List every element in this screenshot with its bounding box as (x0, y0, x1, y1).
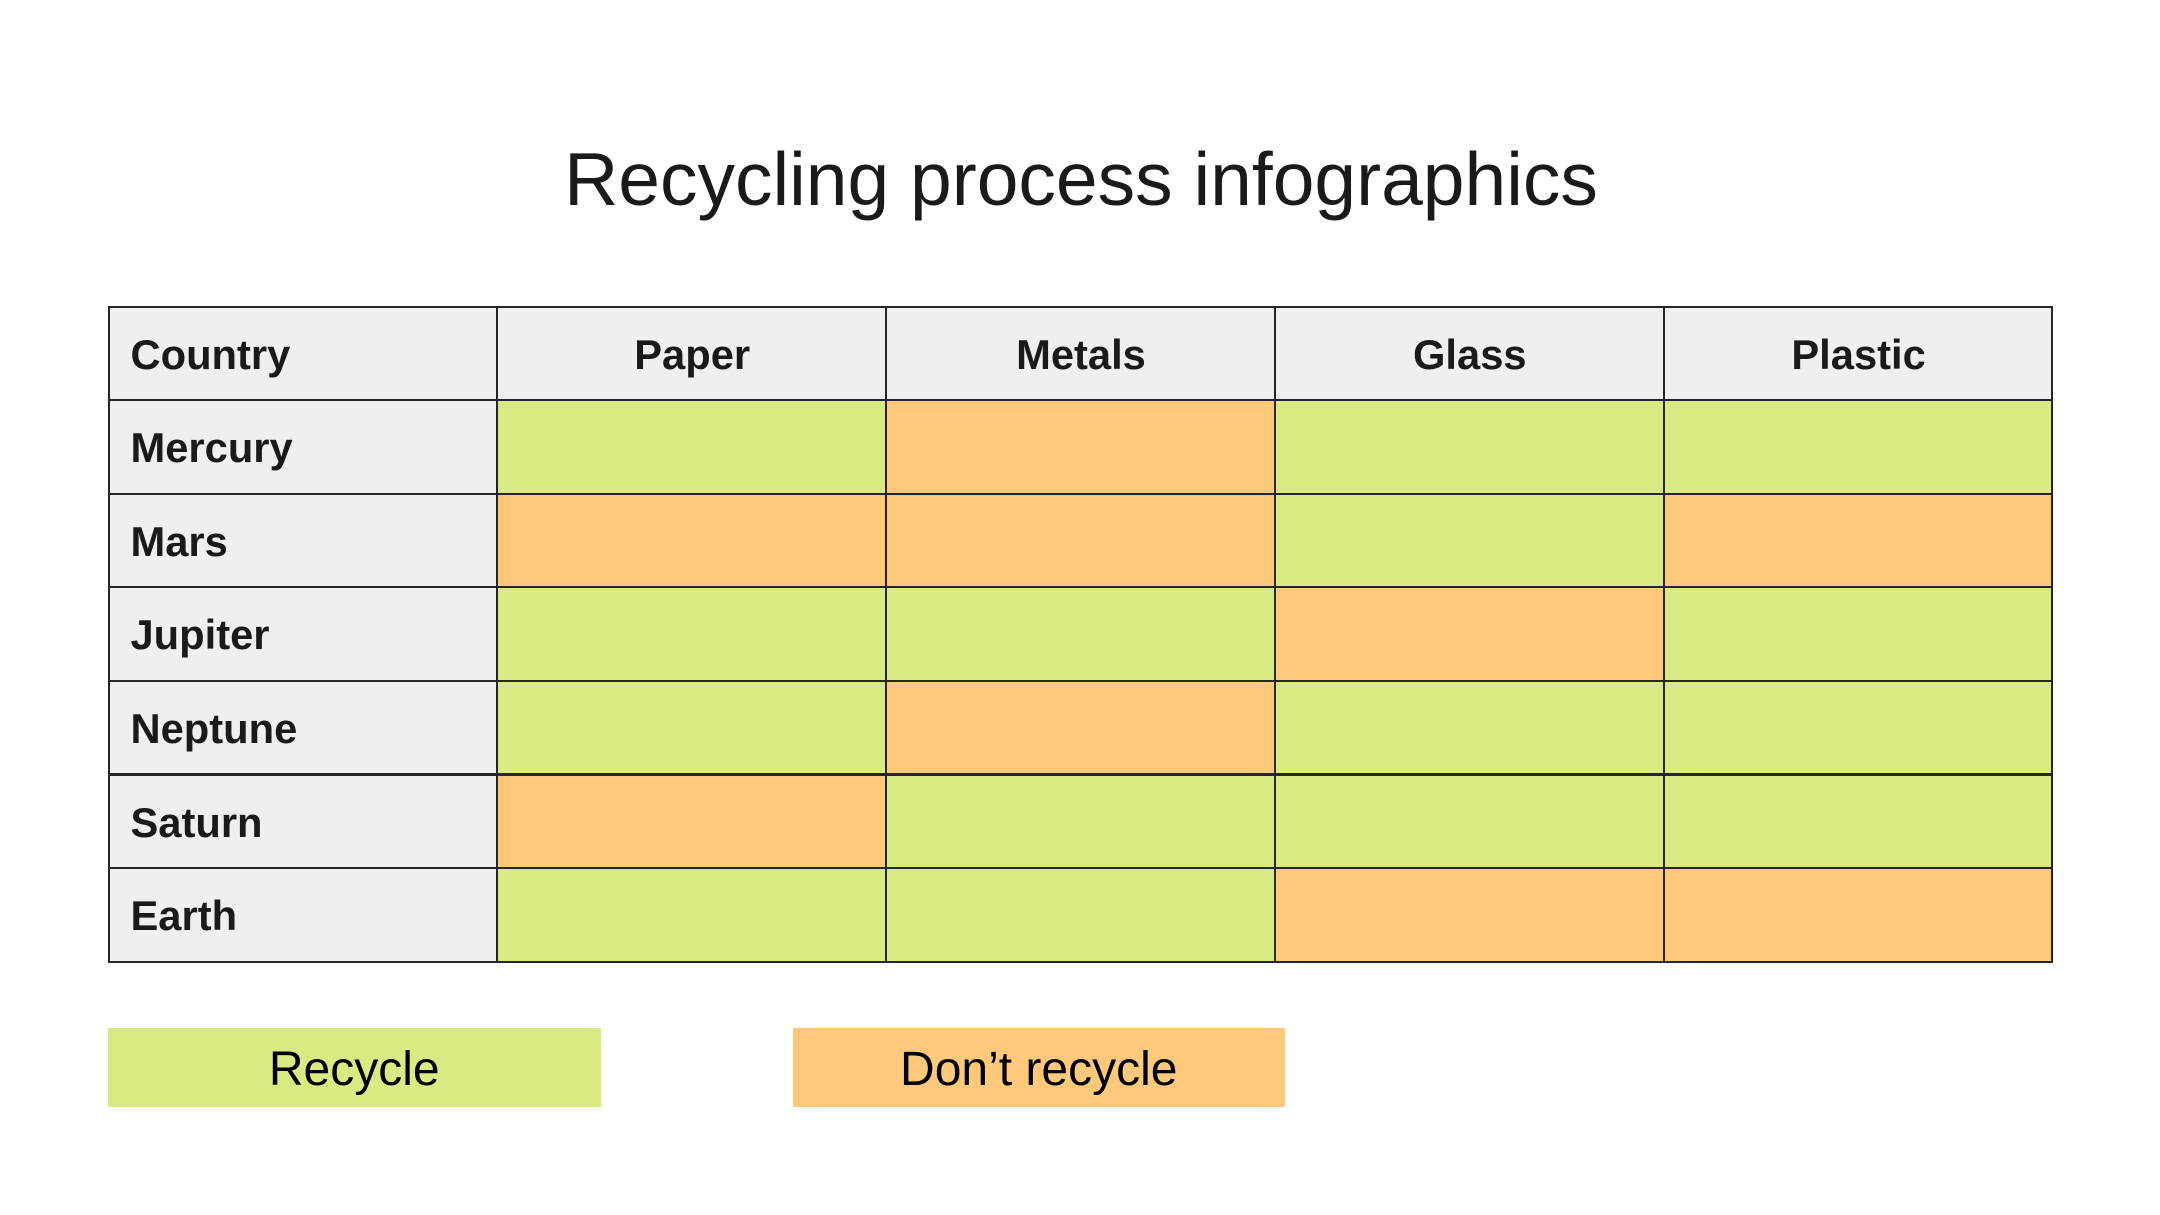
legend: Don't recycle (792, 1028, 1285, 1107)
Neptune Glass: recycle (1274, 680, 1665, 775)
legend: Recycle (108, 1028, 600, 1107)
row label: Neptune (108, 680, 498, 775)
Mercury Glass: recycle (1274, 399, 1665, 495)
row label: Jupiter: Jupiter (130, 611, 270, 658)
Saturn Glass: recycle (1274, 774, 1665, 869)
Earth Glass: don't recycle (1274, 867, 1665, 963)
Mercury Metals: don't recycle (885, 399, 1276, 495)
row label: Mars (108, 493, 498, 588)
Neptune Metals: don't recycle (885, 680, 1276, 775)
header: Glass: Glass (1413, 330, 1527, 378)
Mars Paper: don't recycle (496, 493, 887, 588)
row label: Mars: Mars (130, 518, 228, 565)
header: Glass (1274, 306, 1665, 401)
Earth Plastic: don't recycle (1663, 867, 2053, 963)
Mercury Paper: recycle (496, 399, 887, 495)
Mars Glass: recycle (1274, 493, 1665, 588)
row label: Neptune: Neptune (130, 705, 297, 752)
legend: Recycle: Recycle (269, 1043, 440, 1096)
header: Plastic (1663, 306, 2053, 401)
row label: Earth (108, 867, 498, 963)
header: Metals: Metals (1016, 330, 1146, 378)
Saturn Metals: recycle (885, 774, 1276, 869)
Jupiter Glass: don't recycle (1274, 586, 1665, 682)
Neptune Plastic: recycle (1663, 680, 2053, 775)
row label: Jupiter (108, 586, 498, 682)
Earth Paper: recycle (496, 867, 887, 963)
header: Plastic: Plastic (1791, 330, 1926, 378)
Mars Plastic: don't recycle (1663, 493, 2053, 588)
Neptune Paper: recycle (496, 680, 887, 775)
Mars Metals: don't recycle (885, 493, 1276, 588)
row label: Earth: Earth (130, 892, 237, 939)
Jupiter Paper: recycle (496, 586, 887, 682)
header: Paper: Paper (634, 330, 750, 378)
row label: Saturn (108, 774, 498, 869)
header: Country: Country (130, 330, 290, 378)
Mercury Plastic: recycle (1663, 399, 2053, 495)
table: recycling by country and material (108, 306, 2053, 963)
row label: Saturn: Saturn (130, 798, 263, 846)
row label: Mercury: Mercury (130, 424, 293, 471)
Saturn Paper: don't recycle (496, 774, 887, 869)
legend: Don't recycle: Don’t recycle (900, 1043, 1177, 1096)
Earth Metals: recycle (885, 867, 1276, 963)
header: Country (108, 306, 498, 401)
title: Recycling process infographics (564, 137, 1598, 221)
header: Metals (885, 306, 1276, 401)
Jupiter Metals: recycle (885, 586, 1276, 682)
Jupiter Plastic: recycle (1663, 586, 2053, 682)
header: Paper (496, 306, 887, 401)
Saturn Plastic: recycle (1663, 774, 2053, 869)
row label: Mercury (108, 399, 498, 495)
